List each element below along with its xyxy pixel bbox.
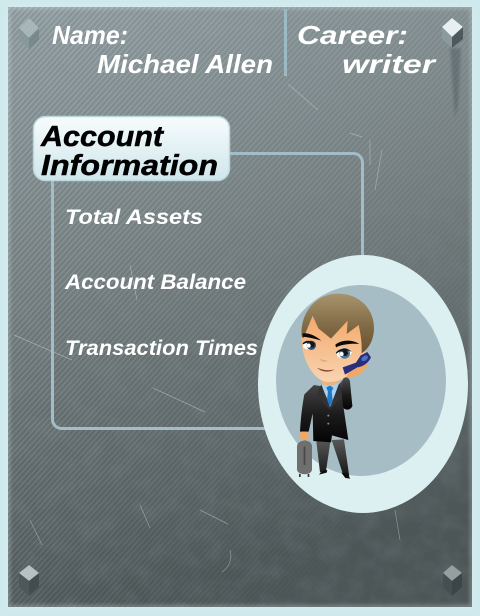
mouth [317, 368, 335, 372]
rivet: top left [19, 18, 39, 49]
heading: account information: Information [41, 150, 218, 182]
eyebrows [303, 333, 359, 347]
total assets: Total Assets [65, 206, 203, 229]
eyes [303, 341, 352, 359]
transaction times: Transaction Times [65, 337, 258, 360]
neck [322, 375, 339, 386]
legs [316, 438, 349, 477]
lapels [316, 383, 343, 410]
hair [302, 294, 374, 353]
account balance: Account Balance [64, 271, 246, 294]
name value: Michael Allen [97, 49, 273, 79]
hand on suitcase [299, 431, 309, 441]
header: name [52, 20, 273, 79]
account panel outline [52, 154, 362, 428]
icon: businessman on phone [297, 294, 374, 479]
rivet: bottom right [443, 565, 462, 596]
rivet: bottom left [19, 565, 39, 596]
shirt [321, 383, 339, 407]
jacket [300, 379, 352, 442]
buttons [327, 415, 329, 417]
tie [326, 385, 333, 408]
phone hand [346, 358, 367, 377]
portrait outer ring [258, 255, 468, 513]
shoes [319, 470, 350, 479]
header divider [284, 9, 287, 76]
suitcase [297, 436, 312, 477]
rivet: top right [442, 18, 463, 118]
portrait inner circle [276, 285, 446, 476]
name label: Name: [52, 20, 128, 50]
heading: account information: Account [40, 121, 164, 153]
heading: account information [34, 116, 230, 182]
header: career [297, 20, 437, 79]
account items [64, 206, 258, 360]
face [302, 307, 367, 382]
career label: Career: [297, 20, 408, 50]
phone [343, 352, 371, 375]
raised arm [341, 377, 352, 409]
nose [320, 358, 328, 362]
career value: writer [342, 49, 437, 79]
